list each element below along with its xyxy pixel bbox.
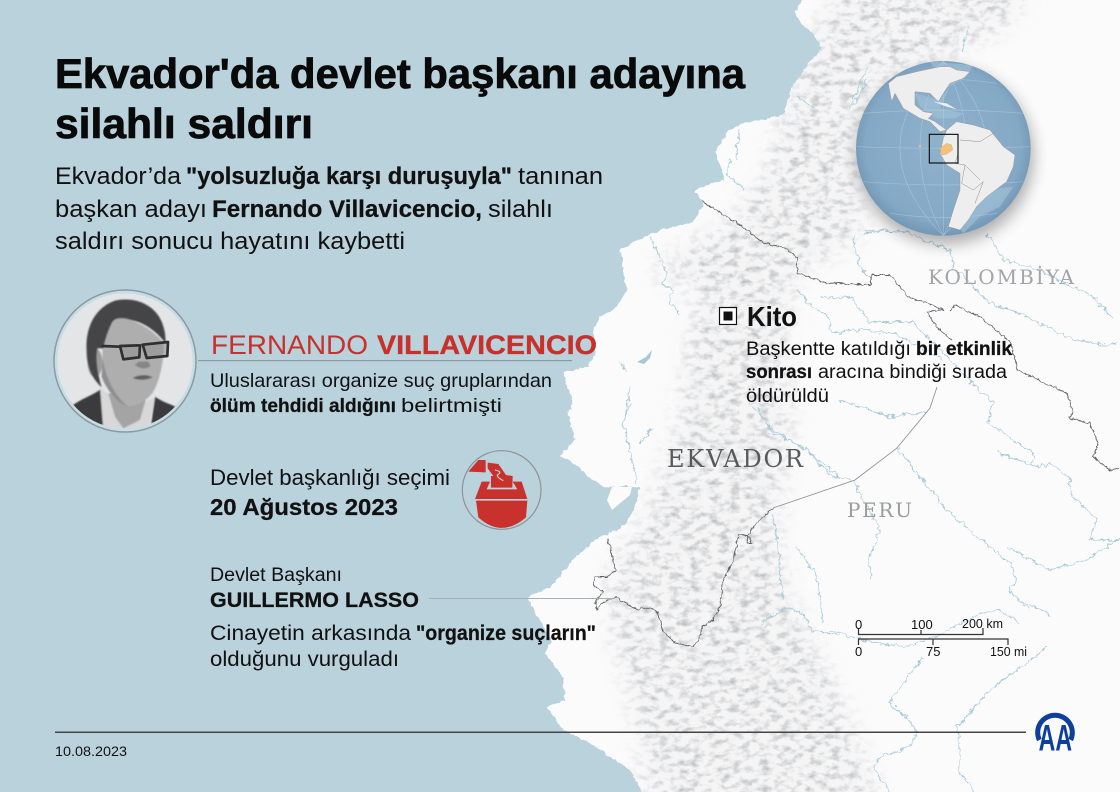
subtitle text: Fernando Villavicencio, [212,196,482,223]
mouth [133,375,153,380]
south america [940,122,1015,230]
scale bar: 100 [911,617,933,632]
title [55,50,746,147]
text: death threats: Uluslararası organize suç gruplarından [210,370,552,392]
text: president Guillermo Lasso [210,565,596,671]
face [102,317,164,406]
logo: Anadolu Agency [1038,715,1072,759]
locator box [929,134,958,163]
mountain terrain [610,0,1040,792]
subtitle text: başkan adayı [55,196,207,223]
cuba [933,102,957,109]
subtitle text [55,163,603,255]
text: death threats [210,370,552,417]
jacket [72,389,176,425]
scale bar: 0 [855,644,862,659]
name: Fernando Villavicencio [211,330,597,360]
quito marker and label [720,301,1012,407]
shirt [100,387,155,430]
gulf island [607,487,632,510]
globe locator [856,61,1033,244]
name: Fernando Villavicencio: VILLAVICENCIO [377,330,597,360]
country label: Ekvador: EKVADOR [667,445,804,473]
text: election date: 20 Ağustos 2023 [210,494,398,520]
quito marker and label: aracına bindiği sırada [818,362,1007,383]
text: president Guillermo Lasso: Devlet Başkanı [210,565,342,586]
country label: Kolombiya: KOLOMBİYA [928,265,1075,289]
quito marker and label: Başkentte katıldığı [746,339,911,360]
globe ocean [856,61,1031,236]
quito marker and label: sonrası [746,362,812,383]
text: president Guillermo Lasso: "organize suçların" [416,622,596,645]
subtitle text: tanınan [518,163,603,190]
hair [86,299,166,387]
country lines [955,133,993,203]
text: president Guillermo Lasso: Cinayetin arkasında [210,622,411,645]
scale bar: 0 [855,617,862,632]
text: president Guillermo Lasso: GUILLERMO LASSO [210,589,419,612]
country label: Peru: PERU [847,498,912,522]
logo: Anadolu Agency: AA [1039,717,1072,759]
text: election date: Devlet başkanlığı seçimi [210,465,450,490]
text: death threats: belirtmişti [401,395,502,417]
subtitle text: Ekvador’da [55,163,182,190]
globe shadow [857,68,1033,244]
text: president Guillermo Lasso: olduğunu vurguladı [210,648,399,671]
name divider [198,360,572,361]
scale bar: 150 mi [990,644,1027,659]
shallow shelf [915,62,1013,233]
quito marker and label: bir etkinlik [916,339,1012,360]
subtitle text: "yolsuzluğa karşı duruşuyla" [186,163,512,190]
borders [593,202,1119,647]
icon: capital marker [720,308,736,324]
icon: ballot box [462,451,541,529]
text: death threats: ölüm tehdidi aldığını [210,395,396,417]
footer rule [55,732,1026,733]
scale bar [855,616,1027,659]
cheek shadow [102,358,127,406]
subtitle text: saldırı sonucu hayatını kaybetti [55,228,405,255]
ear [88,348,102,377]
leader line [429,598,613,599]
portrait: Fernando Villavicencio [54,290,196,437]
graticule [857,61,1030,236]
text: election date [210,465,450,520]
rivers [620,30,1119,792]
scale bar: 200 km [962,616,1003,631]
title: Ekvador'da devlet başkanı adayına [55,50,746,97]
reservoir [637,350,652,364]
ecuador highlight [940,143,953,155]
subtitle text: silahlı [488,196,553,223]
scale bar: 75 [926,644,940,659]
name: Fernando Villavicencio: FERNANDO [211,330,368,360]
date: 10.08.2023 [55,743,127,759]
nose shadow [135,362,151,368]
map: land, terrain, rivers and borders [527,0,1120,792]
quito marker and label: Kito [747,301,797,332]
neck [108,393,147,428]
north america [888,67,970,132]
land mass [527,0,1120,792]
title: silahlı saldırı [55,100,313,147]
glasses [120,342,168,359]
quito marker and label: öldürüldü [746,386,829,407]
